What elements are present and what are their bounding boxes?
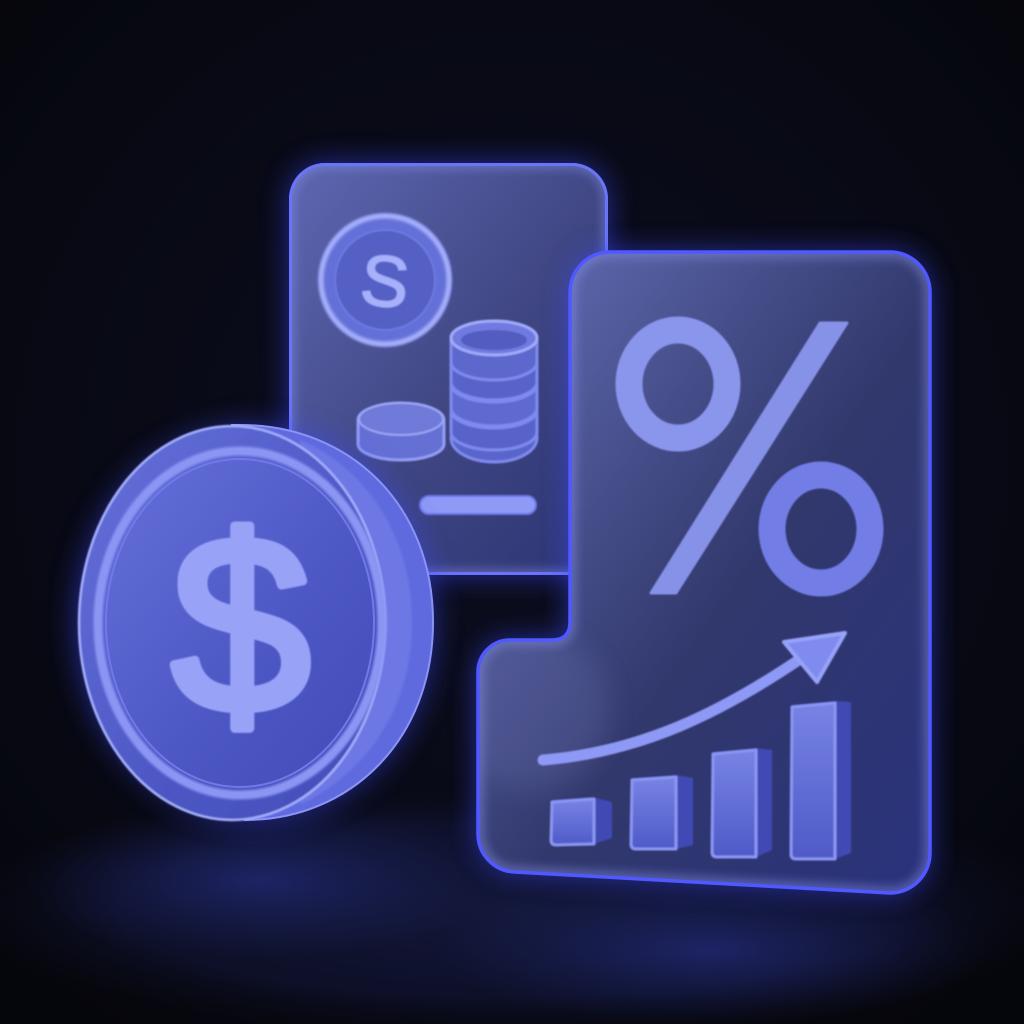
- text placeholder line: [420, 496, 536, 514]
- panel: back card with coins: [289, 163, 608, 575]
- percent lower ring: [772, 475, 870, 583]
- bar 4: [791, 701, 851, 859]
- coin edge: [232, 425, 433, 820]
- icon: small dollar coin: [318, 213, 452, 347]
- percent slash: [651, 323, 847, 593]
- icon: single flat coin: [358, 403, 444, 460]
- bar 1: [551, 797, 612, 845]
- icon: coin stack: [451, 321, 537, 462]
- bar chart: [551, 701, 851, 859]
- arrow: rising trend: [543, 633, 845, 760]
- icon: small dollar coin: S: [357, 240, 413, 324]
- panel: front card with percent and chart: [450, 252, 930, 893]
- bar 2: [631, 775, 693, 849]
- icon: percent sign: [629, 323, 870, 593]
- floor reflection: [0, 785, 1024, 1024]
- coin face: [79, 426, 385, 820]
- percent upper ring: [629, 330, 727, 438]
- icon: large dollar coin: [75, 425, 435, 821]
- dollar sign: $: [171, 485, 311, 764]
- bar 3: [712, 748, 772, 857]
